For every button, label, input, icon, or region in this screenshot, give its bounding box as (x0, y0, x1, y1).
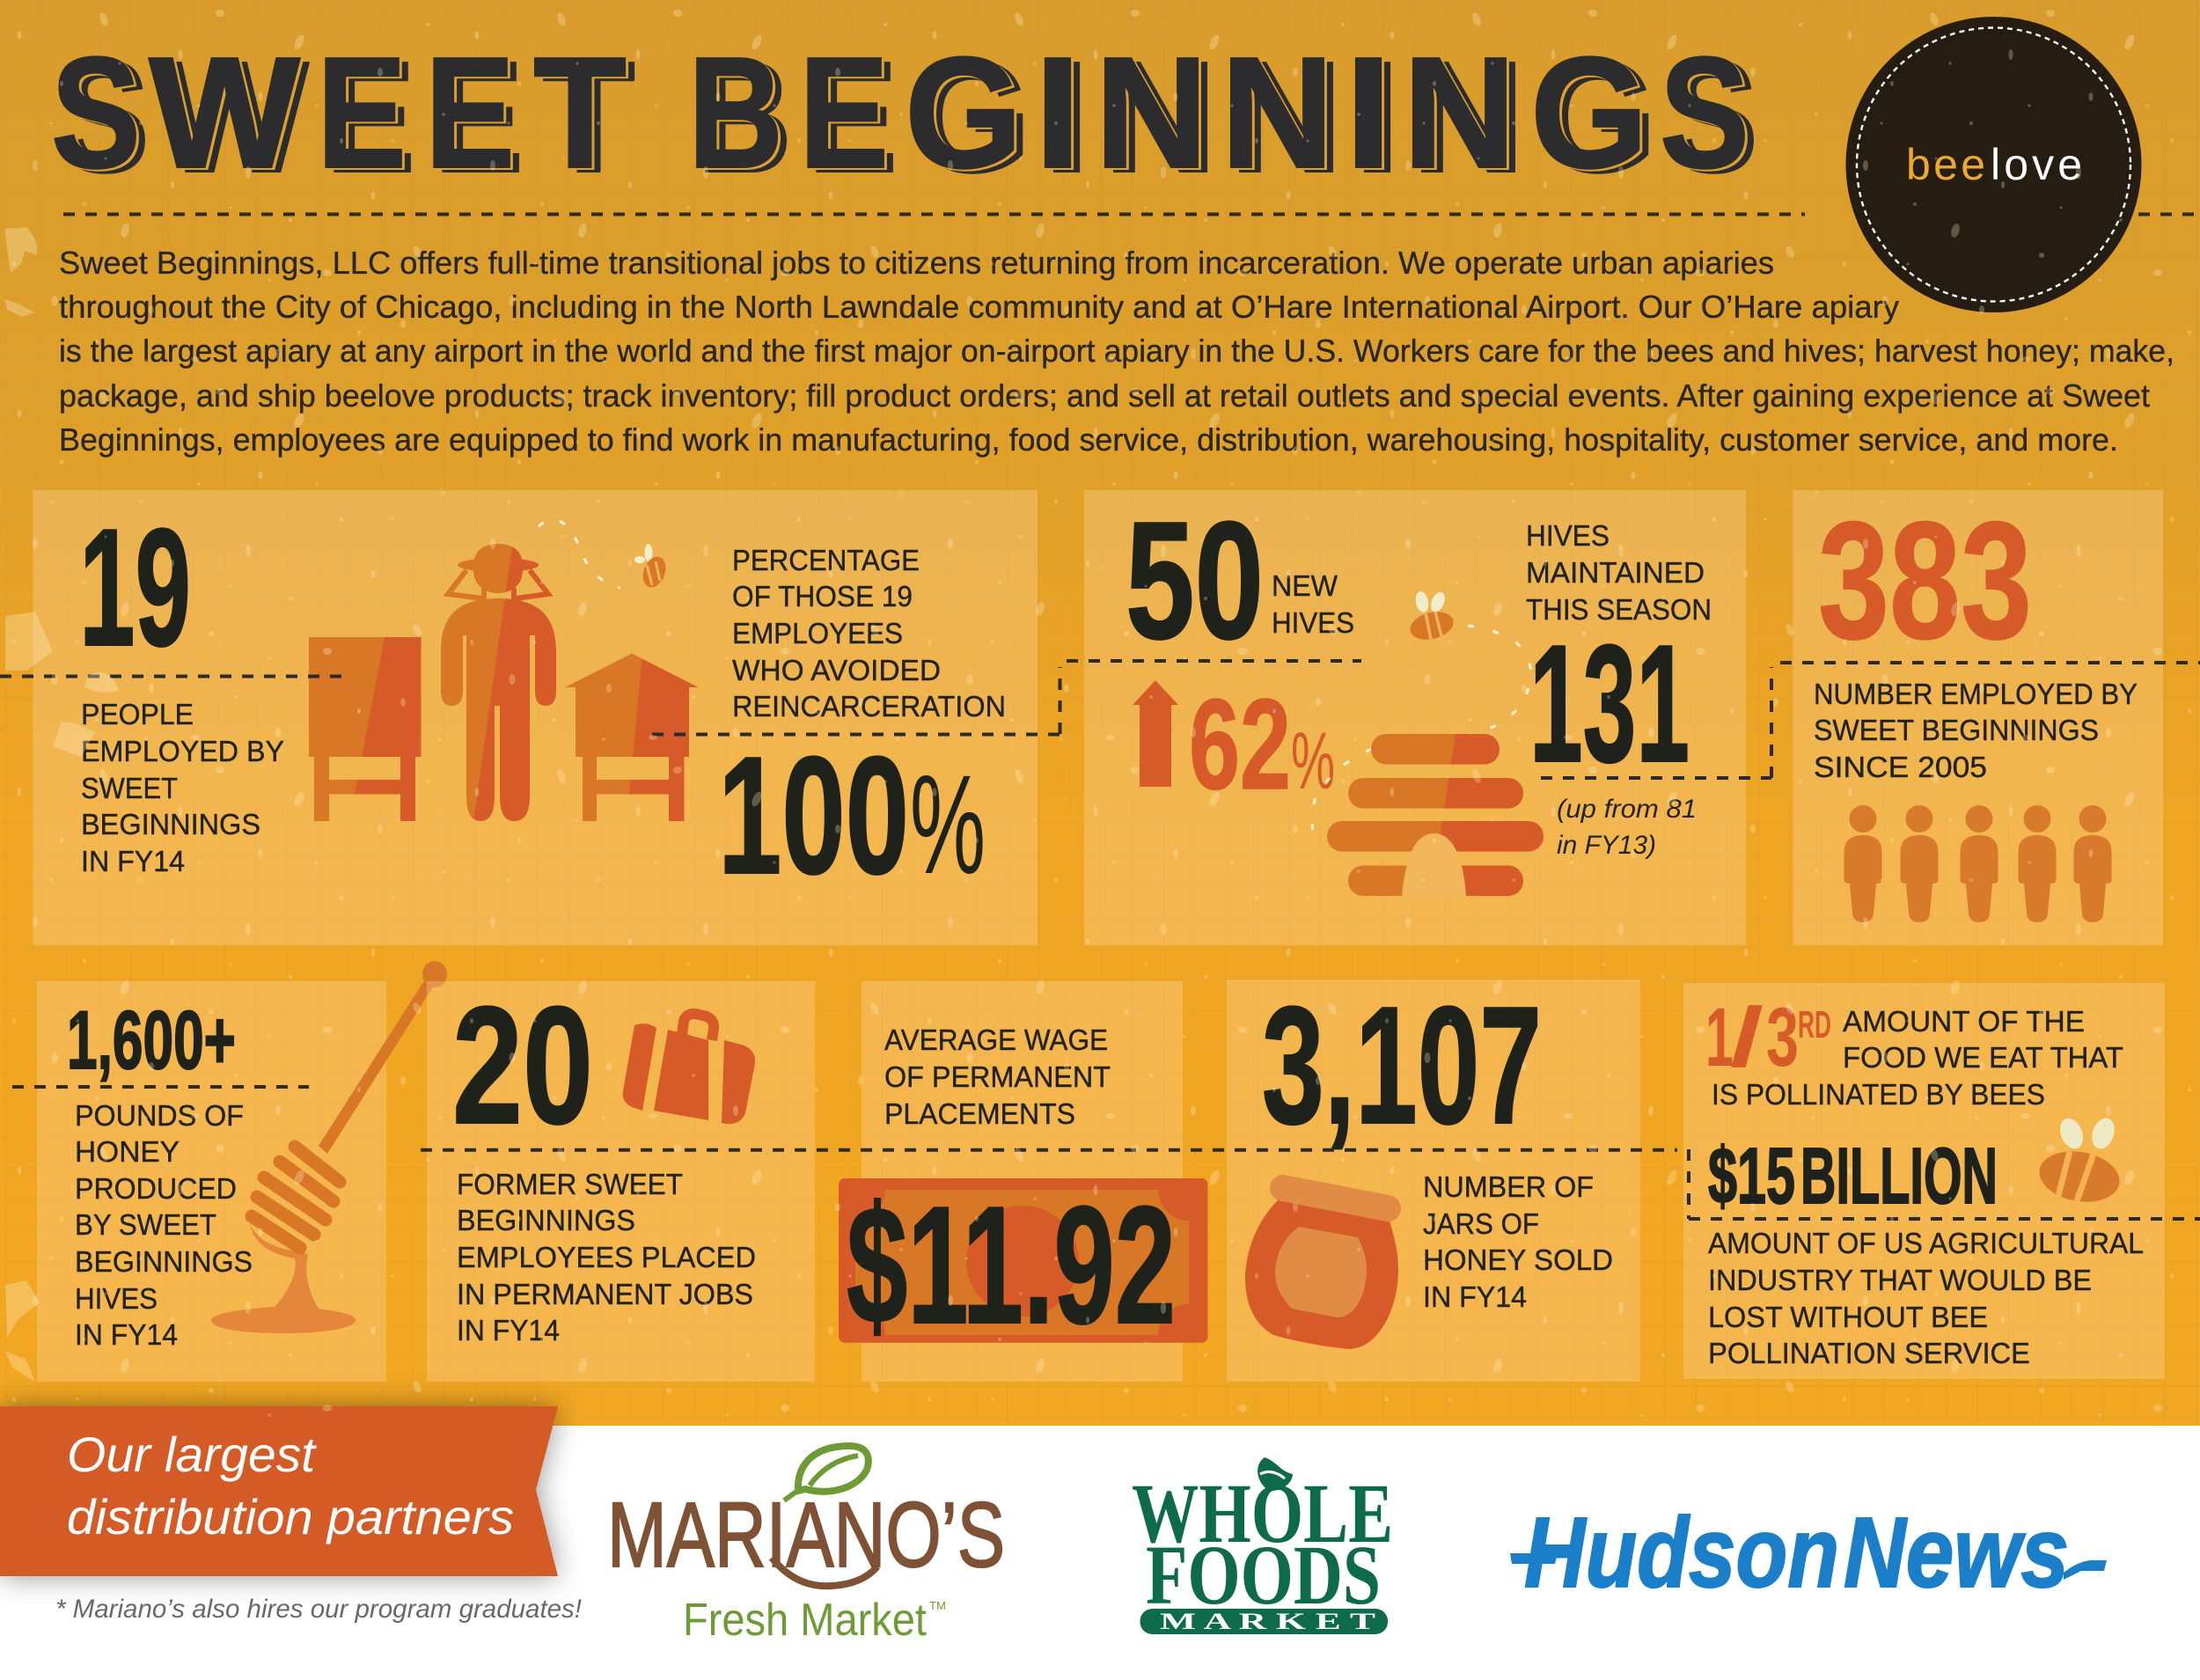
flight path (1312, 626, 1531, 843)
label: amount of us agriculture: AMOUNT OF US AGRICULTURAL (1708, 1227, 2144, 1259)
panel: hives (1084, 488, 1746, 945)
logo badge: beelove (1846, 17, 2142, 312)
label: percentage: REINCARCERATION (732, 690, 1006, 723)
note: up from 81: in FY13) (1557, 831, 1656, 860)
label: people employed (81, 698, 284, 877)
icon: bee (2035, 1115, 2123, 1208)
label: average wage: PLACEMENTS (884, 1097, 1075, 1130)
ribbon: distribution partners: Our largest (67, 1427, 317, 1482)
stat: $11.92: $11.92 (847, 1172, 1176, 1359)
title: N (1221, 25, 1334, 202)
label: new hives: HIVES (1272, 606, 1354, 639)
icon: small bee (634, 544, 670, 591)
stat: 1/3rd: / (1730, 991, 1764, 1084)
logo: hudson news: News (1844, 1497, 2069, 1608)
label: former employees: IN FY14 (457, 1314, 560, 1346)
label: number of jars: JARS OF (1423, 1207, 1539, 1240)
label: hives maintained: MAINTAINED (1526, 556, 1705, 589)
stat: 100%: 100 (718, 723, 909, 909)
stat: 1/3rd: 3 (1766, 991, 1799, 1084)
panel: total employed (1793, 488, 2163, 945)
label: people employed: EMPLOYED BY (81, 735, 284, 767)
stat: 1/3rd: 1 (1705, 991, 1734, 1084)
title: S (51, 25, 141, 202)
label: pounds of honey: BEGINNINGS (75, 1245, 253, 1278)
label: hives maintained: HIVES (1526, 519, 1610, 552)
stat: 3,107: 3,107 (1262, 972, 1542, 1159)
intro text: Beginnings, employees are equipped to find work in manufacturing, food service, distribution, warehousing, hospitality, customer service, and more. (59, 422, 2118, 458)
label: percentage: OF THOSE 19 (732, 580, 913, 613)
label: former employees: FORMER SWEET (457, 1168, 683, 1200)
intro text: throughout the City of Chicago, including in the North Lawndale community and at O’Hare International Airport. Our O’Hare apiary (59, 289, 1899, 325)
logo: hudson news: Hudson (1524, 1497, 1839, 1608)
icon: beekeeper (441, 544, 556, 821)
label: amount of food (1712, 1005, 2123, 1111)
note: up from 81: (up from 81 (1557, 795, 1697, 824)
label: number of jars: HONEY SOLD (1423, 1243, 1613, 1276)
logo: mariano's: MARIANO’S (607, 1484, 1005, 1587)
label: pounds of honey: IN FY14 (75, 1318, 178, 1351)
label: pounds of honey: PRODUCED (75, 1172, 237, 1205)
title: N (1095, 25, 1208, 202)
label: number employed: NUMBER EMPLOYED BY (1814, 678, 2138, 710)
label: amount of us agriculture: LOST WITHOUT BEE (1708, 1301, 1988, 1333)
label: people employed: PEOPLE (81, 698, 194, 730)
stat: 100%: % (910, 745, 986, 903)
panel: pollination (1683, 983, 2165, 1379)
label: number employed: SWEET BEGINNINGS (1814, 714, 2099, 746)
panel: average wage (839, 981, 1207, 1382)
label: number employed: SINCE 2005 (1814, 751, 1987, 783)
label: amount of us agriculture (1708, 1227, 2144, 1369)
icon: left hive (309, 637, 421, 821)
label: pounds of honey: HONEY (75, 1135, 180, 1168)
label: people employed: SWEET (81, 772, 178, 804)
logo badge: beelove: love (1991, 140, 2082, 189)
stat: 1/3rd (1705, 991, 1831, 1084)
label: number of jars (1423, 1170, 1613, 1313)
label: former employees: IN PERMANENT JOBS (457, 1278, 753, 1310)
label: percentage: EMPLOYEES (732, 617, 903, 649)
label: new hives: NEW (1272, 569, 1338, 602)
title: E (425, 25, 515, 202)
label: amount of us agriculture: POLLINATION SERVICE (1708, 1337, 2030, 1369)
flight path (539, 520, 620, 588)
footnote: * Mariano’s also hires our program graduates! (55, 1595, 583, 1624)
label: average wage: OF PERMANENT (884, 1060, 1111, 1093)
label: amount of food: IS POLLINATED BY BEES (1712, 1078, 2045, 1111)
partners strip (0, 1426, 2200, 1680)
label: pounds of honey: HIVES (75, 1282, 158, 1315)
logo badge: beelove: bee (1906, 140, 1985, 189)
intro text: package, and ship beelove products; track inventory; fill product orders; and sell at retail outlets and special events. After gaining experience at Sweet (59, 378, 2150, 414)
ribbon: distribution partners: distribution partners (67, 1489, 514, 1544)
panel: permanent jobs (427, 972, 815, 1382)
stat: 383: 383 (1818, 488, 2032, 674)
logo: mariano's: Fresh Market (683, 1595, 927, 1646)
label: number employed (1814, 678, 2138, 783)
title: G (1530, 25, 1648, 202)
icon: honey dipper (211, 961, 447, 1333)
icon: up arrow (1133, 680, 1178, 787)
label: number of jars: NUMBER OF (1423, 1170, 1594, 1203)
label: number of jars: IN FY14 (1423, 1280, 1527, 1313)
label: percentage: PERCENTAGE (732, 544, 920, 576)
icon: honey jar (1245, 1188, 1398, 1349)
intro text (59, 245, 2174, 458)
logo: whole foods (1132, 1457, 1393, 1634)
logo: mariano's: TM (929, 1599, 946, 1612)
icon: bee (1407, 590, 1456, 644)
title: G (905, 25, 1023, 202)
panel: jars sold (1227, 972, 1640, 1382)
label: former employees (457, 1168, 756, 1346)
stat: 19: 19 (79, 495, 191, 681)
title: T (533, 25, 627, 202)
label: pounds of honey (75, 1099, 253, 1351)
intro text: Sweet Beginnings, LLC offers full-time transitional jobs to citizens returning from incarceration. We operate urban apiaries (59, 245, 1774, 281)
logo: mariano's (607, 1446, 1005, 1646)
title: I (1345, 25, 1392, 202)
label: hives maintained: THIS SEASON (1526, 593, 1712, 626)
ribbon: distribution partners (0, 1406, 558, 1576)
label: amount of food: AMOUNT OF THE (1843, 1005, 2085, 1038)
label: people employed: IN FY14 (81, 845, 185, 877)
label: former employees: EMPLOYEES PLACED (457, 1241, 756, 1273)
icon: five people (1844, 805, 2112, 922)
icon: skep hive (1327, 734, 1544, 897)
stat: 1,600+: 1,600+ (67, 994, 236, 1086)
panel: pounds of honey (37, 961, 447, 1382)
label: former employees: BEGINNINGS (457, 1204, 635, 1236)
logo: whole foods: FOODS (1146, 1528, 1381, 1622)
stat: 50: 50 (1126, 488, 1264, 674)
stat: 131: 131 (1529, 611, 1690, 797)
label: amount of us agriculture: INDUSTRY THAT WOULD BE (1708, 1264, 2092, 1296)
stat: $15 billion: $15 (1708, 1133, 1795, 1221)
icon: dollar bill (839, 1178, 1207, 1343)
title: I (1034, 25, 1082, 202)
label: average wage: AVERAGE WAGE (884, 1023, 1108, 1056)
icon: right hive (565, 653, 699, 821)
label: pounds of honey: POUNDS OF (75, 1099, 244, 1132)
panel: employees (33, 490, 1038, 945)
logo: hudson news (1510, 1497, 2107, 1608)
dashed connectors (0, 215, 2200, 1219)
stat: 20: 20 (452, 972, 593, 1159)
stat: 62%: % (1291, 716, 1335, 806)
title: S (1660, 25, 1749, 202)
ribbon shadow (0, 1406, 558, 1576)
label: percentage (732, 544, 1006, 723)
label: amount of food: FOOD WE EAT THAT (1843, 1041, 2123, 1074)
label: people employed: BEGINNINGS (81, 808, 260, 840)
stat: 1/3rd: RD (1798, 1003, 1831, 1046)
title: W (149, 25, 300, 202)
logo: whole foods: M A R K E T (1160, 1609, 1375, 1634)
note: up from 81 (1557, 795, 1697, 860)
intro text: is the largest apiary at any airport in the world and the first major on-airport apiary in the U.S. Workers care for the bees and hives; harvest honey; make, (59, 333, 2174, 369)
title: E (317, 25, 407, 202)
label: hives maintained (1526, 519, 1712, 626)
label: new hives (1272, 569, 1354, 639)
stat: $15 billion: BILLION (1800, 1133, 1998, 1221)
title: E (799, 25, 889, 202)
icon: suitcase (623, 1014, 755, 1124)
label: average wage (884, 1023, 1111, 1130)
label: pounds of honey: BY SWEET (75, 1208, 216, 1241)
title: B (688, 25, 783, 202)
stat: 62%: 62 (1189, 672, 1291, 816)
logo: whole foods: WHOLE (1132, 1466, 1393, 1560)
title: N (1403, 25, 1516, 202)
label: percentage: WHO AVOIDED (732, 654, 941, 686)
